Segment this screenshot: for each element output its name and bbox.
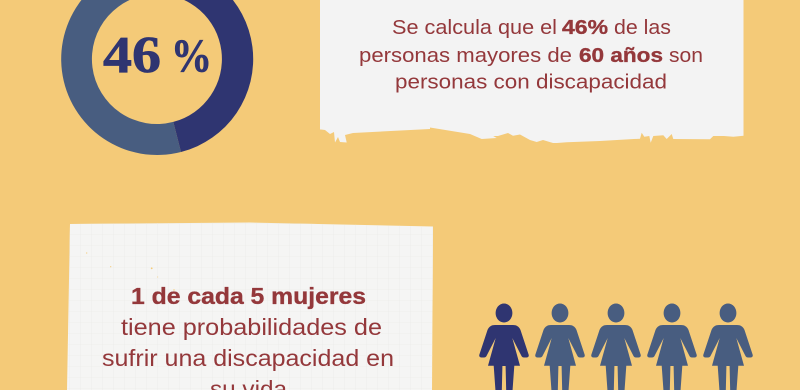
icon: woman 5 [703,304,753,390]
statement text: personas con discapacidad [395,70,667,94]
donut value: % [171,30,212,82]
statement text: son [669,44,703,67]
icon: woman highlighted [479,304,529,390]
icon: woman 2 [535,304,585,390]
statement text: 1 de cada 5 mujeres [131,283,366,309]
statement text: personas mayores de [359,44,572,67]
grid paper sheet [67,222,433,390]
panel: grid paper with 1 in 5 women statement [67,222,433,390]
statement text [102,283,394,390]
statement text: 60 años [579,44,663,67]
donut chart: 46% [61,0,253,155]
donut segment: remaining 54% [61,0,181,155]
donut value: 46 [103,27,161,84]
statement text: sufrir una discapacidad en [102,345,394,371]
donut segment: 46% [157,0,253,152]
panel: torn paper with 46% statement [320,0,744,143]
torn paper shape [320,0,744,143]
statement text: de las [614,16,671,39]
pictogram: five women, one highlighted [479,304,753,390]
statement text: 46% [562,16,608,39]
statement text: tiene probabilidades de [121,314,382,340]
donut value [103,27,212,84]
statement text [359,16,703,94]
statement text: Se calcula que el [392,16,557,39]
icon: woman 4 [647,304,697,390]
icon: woman 3 [591,304,641,390]
